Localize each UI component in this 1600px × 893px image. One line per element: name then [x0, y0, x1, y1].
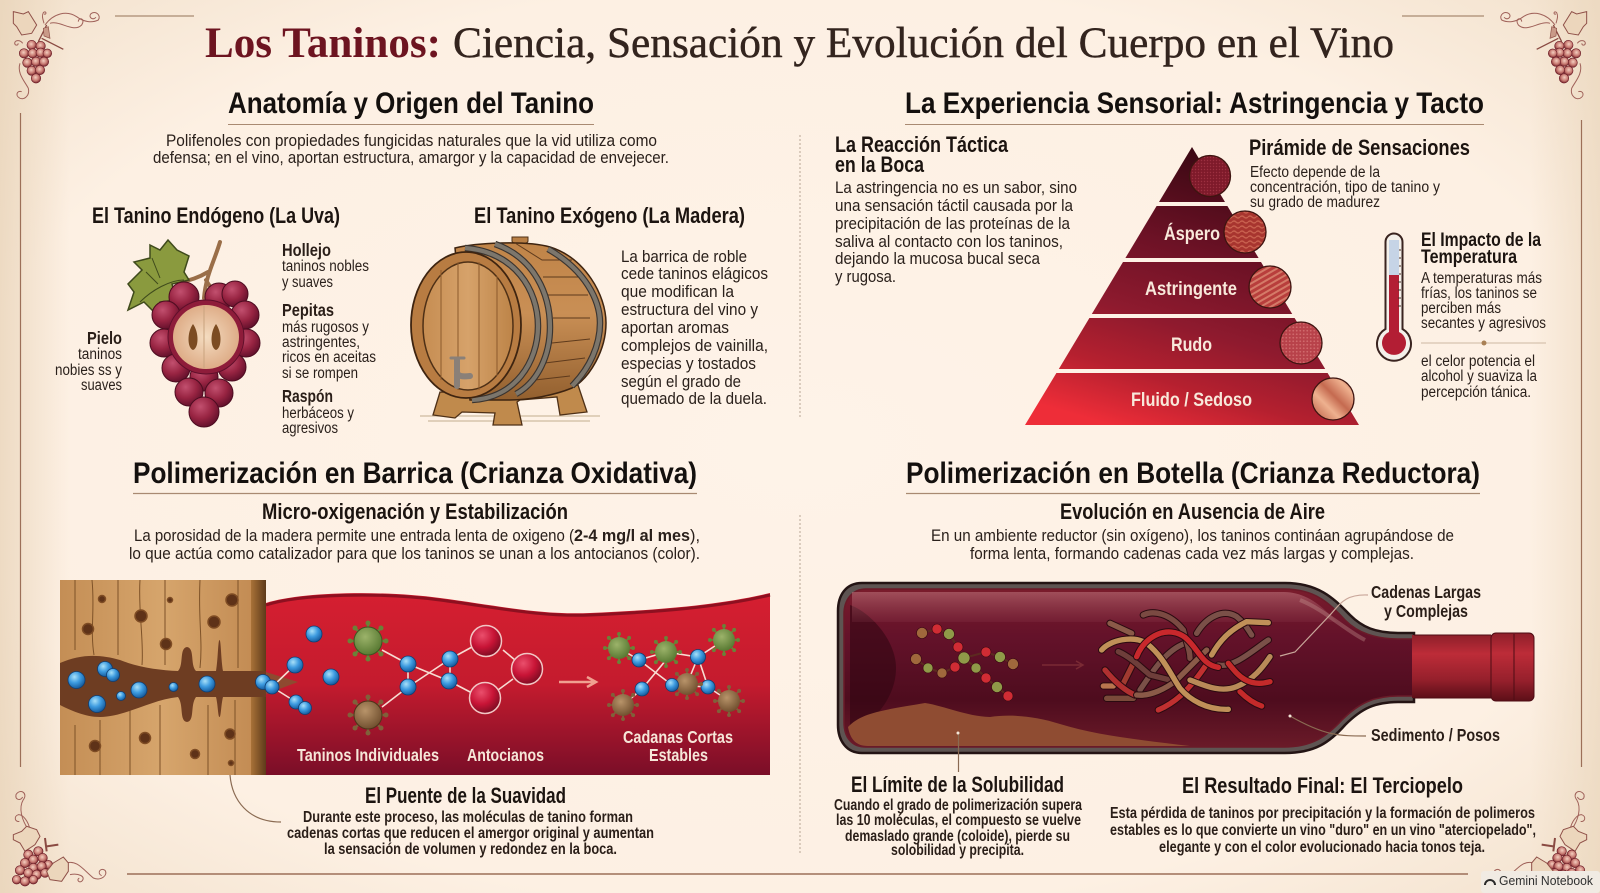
label: Hollejo: taninos nobles: [282, 258, 369, 275]
micro-oxygenation text: 2-4 mg/l al mes: [574, 526, 690, 545]
tactile reaction text: y rugosa.: [835, 268, 896, 286]
dark glass base: [850, 605, 896, 735]
subheading: tactile reaction: La Reacción Táctica: [835, 132, 1009, 157]
panel: barrel polymerization: [60, 457, 770, 858]
label: Pielo: taninos: [78, 346, 122, 363]
micro-oxygenation text: lo que actúa como catalizador para que los taninos se unan a los antocianos (color).: [129, 544, 700, 563]
absence of air text: forma lenta, formando cadenas cada vez más largas y complejas.: [970, 544, 1414, 563]
micro-oxygenation text: [129, 526, 700, 563]
temperature text: perciben más: [1421, 300, 1501, 317]
label: Raspón: agresivos: [282, 420, 338, 437]
tactile reaction text: dejando la mucosa bucal seca: [835, 250, 1041, 268]
diagram labels: [297, 727, 733, 765]
heading: anatomy: Anatomía y Origen del Tanino: [228, 87, 594, 120]
band labels: [1131, 223, 1252, 411]
pyramid caption: su grado de madurez: [1250, 194, 1380, 211]
subheading: absence of air: Evolución en Ausencia de Aire: [1060, 499, 1325, 524]
micro-oxygenation text: La porosidad de la madera permite une entrada lenta de oxigeno (: [134, 526, 574, 545]
label: Pepitas: más rugosos y: [282, 319, 369, 336]
label: Raspón: [282, 386, 354, 437]
heading: bottle: Polimerización en Botella (Crianza Reductora): [906, 457, 1480, 490]
callout: solubility limit: [834, 772, 1082, 859]
bottle labels: y Complejas: [1384, 601, 1468, 621]
callout: solubility limit: solobilidad y precipita.: [891, 842, 1024, 859]
panel: anatomy and origin of tannin: [55, 87, 768, 437]
subheading: tactile reaction: en la Boca: [835, 152, 925, 177]
label: Raspón: Raspón: [282, 386, 333, 406]
barrel text: que modifican la: [621, 283, 735, 301]
title: Ciencia, Sensación y Evolución del Cuerpo en el Vino: [453, 20, 1394, 67]
temperature text: percepción tánica.: [1421, 384, 1531, 401]
diagram labels: Taninos Individuales: [297, 745, 439, 765]
micro-oxygenation text: ),: [690, 526, 700, 545]
callout: final result: [1110, 773, 1536, 856]
label: Pepitas: astringentes,: [282, 334, 360, 351]
temperature text: [1421, 229, 1546, 401]
intro text: defensa; en el vino, aportan estructura, amargor y la capacidad de envejecer.: [153, 148, 669, 167]
intro text: Polifenoles con propiedades fungicidas naturales que la vid utiliza como: [166, 131, 657, 150]
badge: Gemini Notebook: Gemini Notebook: [1499, 873, 1593, 888]
barrel text: complejos de vainilla,: [621, 337, 768, 355]
callout: solubility limit: las 10 moléculas, el compuesto se vuelve: [836, 812, 1081, 829]
band labels: Astringente: [1145, 279, 1237, 300]
tactile reaction text: [835, 179, 1077, 286]
chart: sensation pyramid: [1025, 147, 1359, 425]
tactile reaction text: una sensación táctil causada por la: [835, 197, 1074, 215]
temperature text: Temperatura: [1421, 246, 1517, 268]
corner ornament: top left: [13, 12, 99, 99]
temperature text: secantes y agresivos: [1421, 315, 1546, 332]
label: Hollejo: Hollejo: [282, 240, 331, 260]
callout: smoothness bridge: El Puente de la Suavidad: [365, 783, 566, 808]
band labels: Rudo: [1171, 335, 1212, 356]
barrel stand: [433, 385, 587, 425]
corner ornament: bottom right: [1494, 792, 1588, 886]
short bead chain: [910, 624, 1018, 701]
temperature text: el celor potencia el: [1421, 353, 1535, 370]
label: Pielo: nobies ss y: [55, 362, 122, 379]
texture circles: [1190, 156, 1354, 420]
temperature text: A temperaturas más: [1421, 270, 1542, 287]
icon: grape bunch: [128, 240, 260, 427]
barrel text: según el grado de: [621, 373, 741, 391]
band labels: Áspero: [1164, 223, 1220, 245]
temperature text: El Impacto de la: [1421, 229, 1541, 251]
temperature text: frías, los taninos se: [1421, 285, 1537, 302]
callout: final result: El Resultado Final: El Terciopelo: [1182, 773, 1463, 798]
callout: final result: elegante y con el color evolucionado hacia tonos teja.: [1159, 839, 1485, 856]
absence of air text: En un ambiente reductor (sin oxígeno), los taninos contináan agrupándose de: [931, 526, 1454, 545]
barrel body: [455, 243, 606, 400]
diagram labels: Estables: [649, 745, 708, 765]
corner ornament: bottom left: [12, 792, 106, 886]
diagram labels: Antocianos: [467, 745, 544, 765]
spigot: [451, 358, 470, 386]
label: Raspón: herbáceos y: [282, 405, 354, 422]
leader line: [230, 775, 281, 822]
label: Pielo: suaves: [81, 377, 122, 394]
anthocyanins: [470, 626, 542, 714]
long tangled chains: [1102, 613, 1270, 710]
molecular bonds: [272, 640, 729, 707]
label: Pielo: Pielo: [87, 328, 122, 348]
wood stave: [60, 580, 298, 775]
illustration: wine bottle: [838, 583, 1534, 753]
barrel text: especias y tostados: [621, 355, 756, 373]
subheading: micro-oxygenation: Micro-oxigenación y Estabilización: [262, 499, 568, 524]
wine: [266, 593, 770, 775]
panel: bottle polymerization: [834, 457, 1536, 859]
band labels: Fluido / Sedoso: [1131, 390, 1252, 411]
tannin viruses left: [348, 620, 388, 736]
tactile reaction text: precipitación de las proteínas de la: [835, 215, 1071, 233]
badge: Gemini Notebook: [1481, 871, 1600, 893]
barrel face: [411, 252, 521, 398]
subheading: tactile reaction: [835, 132, 1009, 177]
bung: [512, 237, 528, 244]
blue oxygen molecules in the pore: [68, 662, 215, 712]
callout: solubility limit: El Límite de la Solubilidad: [851, 772, 1064, 797]
callout: solubility limit: demaslado grande (coloide), pierde su: [845, 828, 1070, 845]
pyramid bands: [1025, 147, 1359, 425]
corner ornament: top right: [1501, 12, 1587, 99]
barrel text: La barrica de roble: [621, 248, 747, 266]
pyramid caption: concentración, tipo de tanino y: [1250, 179, 1440, 196]
stable short-chain tannins: [603, 624, 745, 721]
sediment: [848, 703, 1190, 746]
leader lines: [956, 595, 1368, 772]
barrel text: aportan aromas: [621, 319, 729, 337]
label: Pielo: [55, 328, 122, 394]
bottle labels: [1371, 582, 1500, 745]
diagram labels: Cadanas Cortas: [623, 727, 733, 747]
bottle cap: [1412, 633, 1534, 701]
icon: thermometer: [1377, 234, 1411, 361]
pyramid caption: Efecto depende de la: [1250, 164, 1380, 181]
barrel text: quemado de la duela.: [621, 390, 767, 408]
heading: barrel: Polimerización en Barrica (Crianza Oxidativa): [133, 457, 697, 490]
hoops: [465, 244, 600, 400]
label: Hollejo: [282, 240, 369, 291]
intro text: [153, 131, 669, 167]
barrel text: cede taninos elágicos: [621, 265, 768, 283]
tactile reaction text: saliva al contacto con los taninos,: [835, 233, 1063, 251]
small arrow in bottle: [1042, 661, 1083, 669]
label: Hollejo: y suaves: [282, 274, 333, 291]
barrel text: [621, 248, 768, 408]
label: Pepitas: ricos en aceitas: [282, 349, 376, 366]
pyramid caption: [1249, 135, 1470, 211]
label: Pepitas: si se rompen: [282, 365, 358, 382]
pyramid caption: Pirámide de Sensaciones: [1249, 135, 1470, 160]
absence of air text: [931, 526, 1454, 563]
glass highlight band: [852, 592, 1337, 622]
callout: smoothness bridge: la sensación de volumen y redondez en la boca.: [324, 841, 617, 858]
temperature text: alcohol y suaviza la: [1421, 368, 1537, 385]
callout: solubility limit: Cuando el grado de polimerización supera: [834, 797, 1082, 814]
label: Pepitas: [282, 300, 376, 382]
bottle labels: Cadenas Largas: [1371, 582, 1481, 602]
tactile reaction text: La astringencia no es un sabor, sino: [835, 179, 1077, 197]
blue molecules in wine: [256, 626, 715, 714]
subheading: wood tannin: El Tanino Exógeno (La Madera): [474, 203, 745, 228]
title: Los Taninos:: [205, 20, 441, 67]
callout: smoothness bridge: cadenas cortas que reducen el amergor original y aumentan: [287, 825, 654, 842]
callout: smoothness bridge: [287, 783, 654, 858]
barrel text: estructura del vino y: [621, 301, 759, 319]
heading: sensory: La Experiencia Sensorial: Astringencia y Tacto: [905, 87, 1484, 120]
panel: sensory experience: [835, 87, 1546, 425]
diagram: oxygen through wood into wine: [60, 580, 770, 775]
bottle labels: Sedimento / Posos: [1371, 725, 1500, 745]
label: Pepitas: Pepitas: [282, 300, 334, 320]
icon: oak barrel: [411, 237, 606, 425]
callout: smoothness bridge: Durante este proceso, las moléculas de tanino forman: [303, 809, 633, 826]
arrow: [559, 677, 596, 687]
subheading: grape tannin: El Tanino Endógeno (La Uva): [92, 203, 340, 228]
